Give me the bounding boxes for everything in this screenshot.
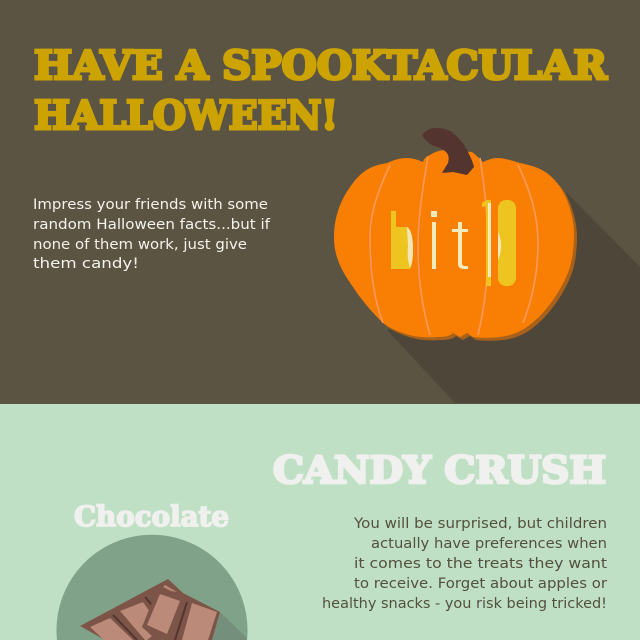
digit 0 — [498, 200, 516, 286]
pumpkin stem — [422, 128, 474, 175]
text: intro paragraph: Impress your friends with some — [33, 197, 268, 213]
heading: Candy Crush: CANDY CRUSH — [273, 448, 606, 492]
pumpkin side shade — [337, 153, 577, 341]
panel: Candy Crush — [0, 404, 640, 640]
heading: Chocolate: Chocolate — [74, 500, 229, 533]
text: intro paragraph: random Halloween facts...but if — [33, 217, 271, 233]
text: candy paragraph: actually have preferences when — [371, 536, 607, 552]
letter b — [391, 211, 413, 269]
pumpkin long shadow — [387, 193, 640, 403]
text: intro paragraph — [33, 197, 271, 272]
chocolate bar — [80, 579, 220, 640]
text: candy paragraph: You will be surprised, but children — [353, 516, 607, 532]
pumpkin rib lines — [370, 157, 538, 335]
chocolate grooves — [113, 597, 187, 640]
title: Have a Spooktacular Halloween: HALLOWEEN! — [34, 93, 338, 139]
text: candy paragraph: it comes to the treats they want — [354, 556, 607, 572]
title: Have a Spooktacular Halloween: HAVE A SPOOKTACULAR — [34, 43, 608, 89]
text: intro paragraph: them candy! — [33, 256, 139, 272]
broken chocolate piece — [142, 590, 183, 638]
title: Have a Spooktacular Halloween — [34, 43, 608, 139]
letter t — [452, 222, 468, 269]
text: candy paragraph: to receive. Forget about apples or — [354, 576, 607, 592]
text: candy paragraph — [322, 516, 607, 612]
icon: chocolate bar in circle — [56, 535, 248, 640]
text: candy paragraph: healthy snacks - you risk being tricked! — [322, 596, 607, 612]
chocolate long shadow — [212, 612, 247, 640]
pumpkin body — [334, 150, 574, 338]
text: intro paragraph: none of them work, just give — [33, 237, 247, 253]
digit 1 — [482, 200, 491, 286]
icon: pumpkin with long shadow — [334, 128, 640, 403]
circle background — [56, 535, 248, 640]
panel: Halloween header — [0, 0, 640, 404]
logo: bit10 — [391, 200, 516, 286]
letter i — [431, 211, 437, 269]
